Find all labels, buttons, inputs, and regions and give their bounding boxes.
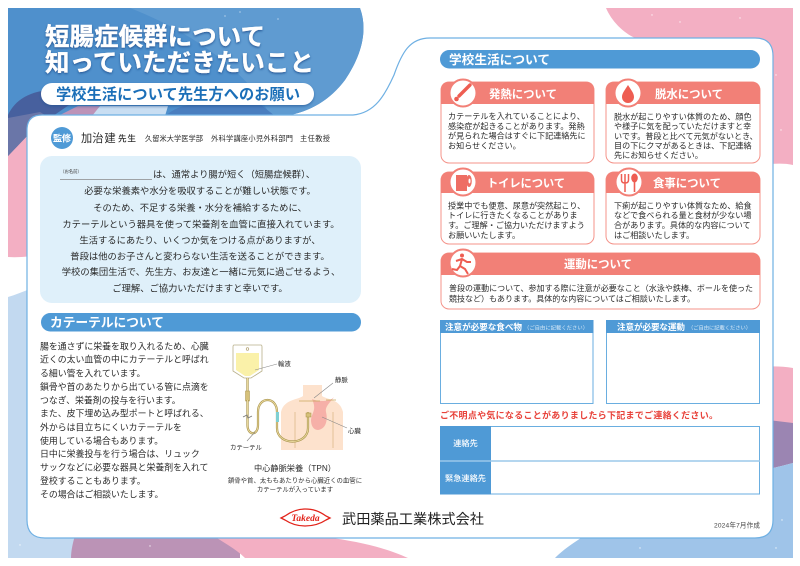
contact notice: ご不明点や気になることがありましたら下記までご連絡ください。 bbox=[440, 410, 718, 420]
card: dehydration bbox=[606, 80, 760, 163]
panel: introduction message: そのため、不足する栄養・水分を補給するために、 bbox=[93, 202, 307, 213]
panel: introduction message bbox=[40, 156, 361, 303]
caption: TPN: 中心静脈栄養（TPN） bbox=[254, 463, 336, 473]
card: meals: はご相談いたします。 bbox=[614, 230, 694, 240]
company logo: Takeda bbox=[291, 514, 320, 524]
text block: catheter explanation: 近くの太い血管の中にカテーテルと呼ばれ bbox=[40, 354, 209, 365]
caption: TPN bbox=[228, 463, 362, 494]
icon: fork and spoon bbox=[616, 168, 642, 196]
text block: catheter explanation: 外からは目立ちにくいカテーテルを bbox=[40, 422, 182, 432]
panel: introduction message: カテーテルという器具を使って栄養剤を血管に直接入れています。 bbox=[62, 218, 340, 230]
text block: catheter explanation: 腸を通さずに栄養を取り入れるため、心臓 bbox=[40, 340, 209, 352]
subtitle pill: 学校生活について先生方へのお願い bbox=[56, 86, 300, 104]
illustration: central venous nutrition bbox=[230, 345, 361, 452]
panel: introduction message: 生活するにあたり、いくつか気をつける点がありますが、 bbox=[79, 234, 321, 246]
card: toilet: トイレについて bbox=[487, 177, 565, 190]
text block: catheter explanation: つなぎ、栄養剤の投与を行います。 bbox=[40, 394, 181, 405]
card: toilet: トイレに行きたくなることがありま bbox=[448, 210, 578, 220]
card: fever: お知らせください。 bbox=[448, 140, 521, 150]
panel: introduction message: （お名前） bbox=[60, 168, 82, 175]
card: exercise: 競技など）もあります。具体的な内容についてはご相談いたします。 bbox=[449, 294, 695, 304]
illustration: central venous nutrition: 静脈 bbox=[335, 375, 348, 384]
form box: foods needing attention: （ご自由に記載ください） bbox=[524, 324, 588, 332]
form box: exercise needing attention: （ご自由に記載ください） bbox=[688, 324, 751, 332]
caption: TPN: カテーテルが入っています bbox=[257, 484, 333, 494]
contact table bbox=[440, 426, 760, 494]
text block: catheter explanation: また、皮下埋め込み型ポートと呼ばれる、 bbox=[40, 408, 209, 419]
supervisor credit bbox=[51, 127, 330, 149]
card: dehydration: や様子に気を配っていただけますと幸 bbox=[614, 121, 751, 131]
card: dehydration: いです。普段と比べて元気がないとき、 bbox=[614, 131, 758, 141]
supervisor credit: 主任教授 bbox=[300, 134, 330, 143]
form box: exercise needing attention: 注意が必要な運動 bbox=[617, 321, 685, 332]
caption: TPN: 鎖骨や首、太ももあたりから心臓近くの血管に bbox=[228, 476, 362, 484]
panel: introduction message: 必要な栄養素や水分を吸収することが難しい状態です。 bbox=[84, 185, 316, 196]
panel: introduction message: ご理解、ご協力いただけますと幸いです。 bbox=[112, 282, 288, 294]
icon: water drop bbox=[614, 80, 642, 106]
title: 知っていただきたいこと bbox=[45, 50, 314, 77]
card: meals: 下痢が起こりやすい体質なため、給食 bbox=[614, 200, 752, 210]
icon: toilet paper bbox=[450, 168, 476, 196]
card: fever: 感染症が起きることがあります。発熱 bbox=[448, 121, 585, 131]
panel: introduction message: 学校の集団生活で、先生方、お友達と一緒に元気に過ごせるよう、 bbox=[62, 266, 340, 277]
card: dehydration: 目の下にクマがあるときは、下記連絡 bbox=[614, 140, 752, 150]
form box: foods needing attention bbox=[440, 320, 594, 404]
supervisor credit: 建 bbox=[104, 132, 116, 145]
card: exercise: 普段の運動について、参加する際に注意が必要なこと（水泳や鉄棒、ボールを使った bbox=[449, 283, 753, 293]
card: toilet: お願いいたします。 bbox=[448, 231, 520, 240]
card: meals: 合があります。具体的な内容について bbox=[614, 220, 751, 230]
title bbox=[45, 24, 314, 77]
card: dehydration: 先にお知らせください。 bbox=[614, 150, 703, 160]
text block: catheter explanation: 使用している場合もあります。 bbox=[40, 435, 163, 446]
card: fever: が見られた場合はすぐに下記連絡先に bbox=[448, 131, 586, 141]
contact table: 緊急連絡先 bbox=[445, 473, 486, 483]
card: dehydration: 脱水について bbox=[655, 87, 723, 101]
heading: school life bbox=[440, 50, 760, 68]
card: meals: などで食べられる量と食材が少ない場 bbox=[614, 210, 751, 220]
text block: catheter explanation: その場合はご相談いたします。 bbox=[40, 488, 163, 500]
supervisor credit: 外科学講座小児外科部門 bbox=[211, 134, 293, 143]
creation date: 2024年7月作成 bbox=[714, 520, 760, 530]
heading: school life: 学校生活について bbox=[449, 52, 550, 67]
text block: catheter explanation: サックなどに必要な器具と栄養剤を入れて bbox=[40, 462, 208, 472]
supervisor credit: 加治 bbox=[81, 131, 103, 145]
text block: catheter explanation: 鎖骨や首のあたりから出ている管に点滴を bbox=[40, 381, 209, 392]
card: dehydration: 脱水が起こりやすい体質のため、顔色 bbox=[614, 112, 752, 122]
panel: introduction message: は、通常より腸が短く（短腸症候群）、 bbox=[153, 168, 315, 180]
card: toilet: 授業中でも便意、尿意が突然起こり、 bbox=[448, 200, 585, 210]
illustration: central venous nutrition: 輸液 bbox=[278, 359, 291, 368]
card: meals: 食事について bbox=[653, 176, 721, 190]
card: exercise: 運動について bbox=[564, 257, 632, 271]
text block: catheter explanation bbox=[40, 340, 209, 500]
illustration: central venous nutrition: カテーテル bbox=[230, 444, 263, 452]
form box: exercise needing attention bbox=[606, 320, 760, 404]
card: toilet: す。ご理解・ご協力いただけますよう bbox=[448, 220, 585, 230]
heading: catheter: カテーテルについて bbox=[50, 315, 164, 330]
company logo bbox=[281, 509, 330, 526]
supervisor credit: 監修 bbox=[53, 132, 72, 144]
heading: catheter bbox=[41, 313, 361, 332]
card: exercise bbox=[441, 250, 760, 309]
supervisor credit: 久留米大学医学部 bbox=[145, 134, 203, 143]
card: fever: 発熱について bbox=[489, 87, 557, 101]
card: fever bbox=[441, 80, 594, 163]
text block: catheter explanation: る細い管を入れています。 bbox=[40, 367, 145, 378]
title: 短腸症候群について bbox=[45, 24, 265, 51]
card: fever: カテーテルを入れていることにより、 bbox=[448, 112, 585, 121]
text block: catheter explanation: 日中に栄養投与を行う場合は、リュック bbox=[40, 448, 200, 459]
card: toilet bbox=[441, 168, 594, 244]
subtitle pill bbox=[41, 83, 314, 105]
text block: catheter explanation: 登校することもあります。 bbox=[40, 475, 146, 486]
form box: foods needing attention: 注意が必要な食べ物 bbox=[445, 321, 522, 332]
contact table: 連絡先 bbox=[453, 438, 478, 448]
company name: 武田薬品工業株式会社 bbox=[342, 512, 484, 528]
panel: introduction message: 普段は他のお子さんと変わらない生活を送ることができます。 bbox=[70, 250, 330, 262]
card: meals bbox=[606, 168, 760, 244]
icon: runner bbox=[450, 250, 476, 276]
illustration: central venous nutrition: 心臓 bbox=[348, 426, 361, 435]
supervisor credit: 先生 bbox=[118, 132, 136, 144]
icon: thermometer bbox=[450, 80, 476, 106]
